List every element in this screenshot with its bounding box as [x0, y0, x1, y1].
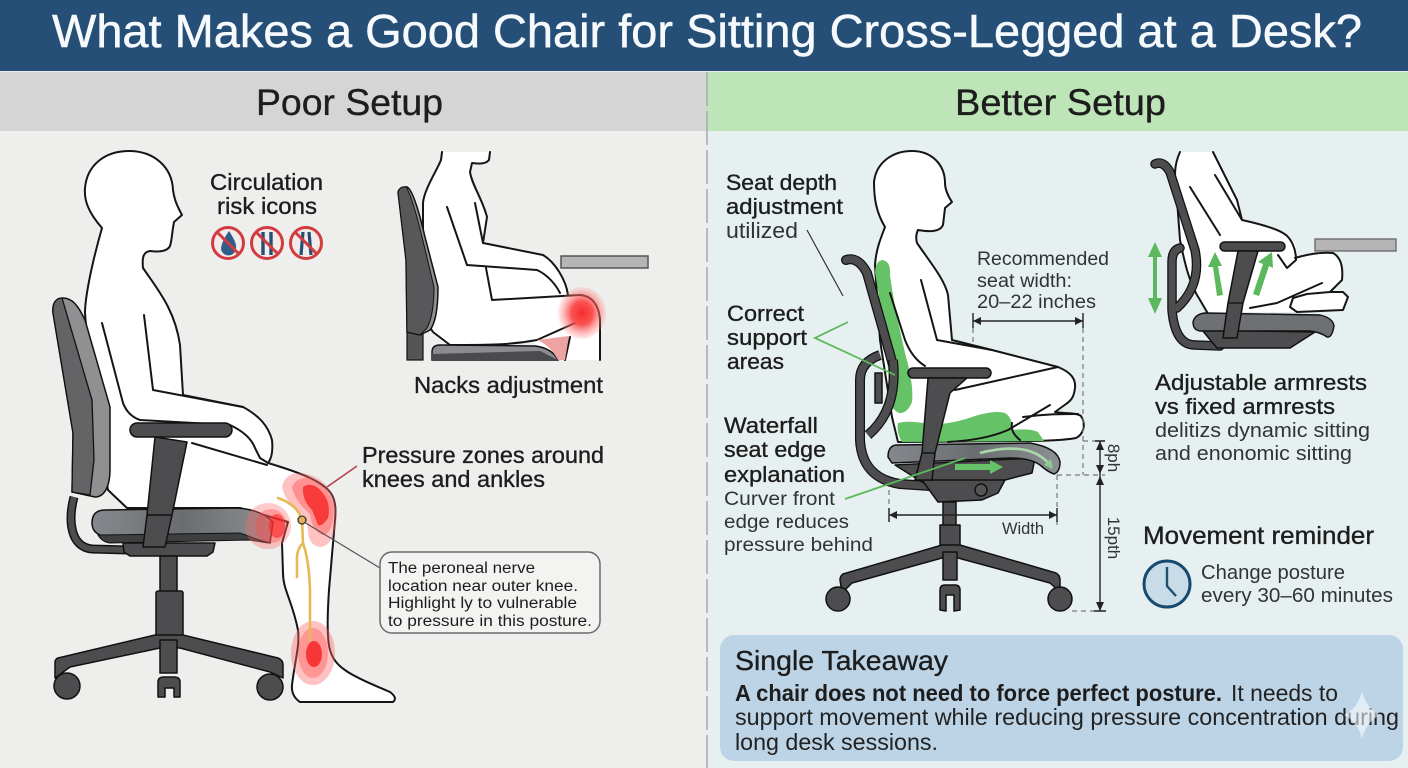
icon: clock: [1144, 561, 1190, 607]
inset: armrests detail: [1148, 152, 1396, 348]
better posture figure and chair: [826, 151, 1084, 611]
movement reminder: Movement reminder: [1143, 522, 1374, 550]
seat: [1202, 330, 1315, 348]
label: waterfall seat edge: explanation: [724, 462, 845, 487]
movement reminder: [1143, 522, 1393, 607]
text: adjustable armrests: Adjustable armrests: [1155, 370, 1367, 395]
heading: better setup: Better Setup: [955, 82, 1166, 123]
label: circulation risk icons: [210, 169, 323, 258]
pressure zone: ankle: [291, 621, 335, 685]
chair base: [55, 635, 283, 678]
pressure at knee: [558, 287, 606, 339]
panel: single takeaway: support movement while reducing pressure concentration during: [735, 704, 1399, 730]
label: waterfall seat edge: [724, 413, 965, 556]
text: adjustable armrests: and enonomic sitting: [1155, 443, 1352, 465]
panel: single takeaway: long desk sessions.: [735, 729, 938, 755]
dimension: recommended seat width: seat width:: [977, 271, 1072, 292]
body: [1175, 152, 1348, 312]
title banner: [0, 0, 1408, 71]
dimension: recommended seat width: 20–22 inches: [977, 292, 1096, 313]
arrow: arm up right: [1253, 252, 1273, 296]
label: seat depth: utilized: [726, 218, 798, 243]
movement reminder: Change posture: [1201, 562, 1345, 584]
armrest and post: [908, 368, 991, 378]
label: pressure zones: knees and ankles: [362, 466, 545, 492]
backrest: [398, 187, 438, 335]
chair post: [407, 330, 423, 360]
title banner: What Makes a Good Chair for Sitting Cross-Legged at a Desk?: [52, 5, 1362, 57]
mount: [922, 480, 1005, 502]
chair seat: [92, 508, 273, 543]
panel: single takeaway: [720, 635, 1403, 761]
inset: poor setup knee detail: [398, 152, 648, 360]
label: nacks adjustment: Nacks adjustment: [414, 372, 604, 398]
arrow: arm up left: [1208, 252, 1223, 296]
label: waterfall seat edge: Curver front: [724, 489, 836, 510]
heading: poor setup: [0, 72, 707, 131]
dimension: recommended seat width: [973, 249, 1109, 475]
arrow: double height: [1148, 242, 1162, 314]
pressure zone: knee: [282, 473, 337, 547]
label: correct support areas: Correct: [727, 301, 805, 326]
label: waterfall seat edge: seat edge: [724, 437, 826, 462]
chair backrest: [53, 298, 110, 497]
dimension: seat height: [1057, 441, 1123, 611]
main poor posture figure and chair: [53, 151, 395, 702]
heading: better setup: [707, 72, 1408, 131]
label: seat depth: Seat depth: [726, 170, 837, 195]
dimension: seat width: [889, 475, 1057, 538]
seat: [432, 345, 558, 360]
label: correct support areas: [727, 301, 895, 375]
label: circulation risk icons: Circulation: [210, 169, 323, 195]
chair back frame: [846, 259, 893, 365]
armrest: [1220, 242, 1285, 251]
peroneal nerve: [278, 498, 310, 640]
panel: single takeaway: It needs to: [1231, 680, 1338, 706]
label: waterfall seat edge: Waterfall: [724, 413, 818, 438]
panel: single takeaway: Single Takeaway: [735, 645, 948, 676]
green support: seat: [898, 412, 1044, 442]
heading: poor setup: Poor Setup: [256, 82, 443, 123]
pressure zone: seat edge: [245, 503, 291, 549]
icon: nerve prohibited: [290, 228, 322, 258]
label: waterfall seat edge: pressure behind: [724, 535, 873, 556]
body: [874, 151, 1084, 442]
icon: sparkle: [1344, 691, 1380, 739]
dimension: seat height: 15pth: [1104, 517, 1123, 559]
right panel background: [707, 131, 1408, 768]
chair frame: [1155, 163, 1220, 346]
chair mount and column: [123, 543, 215, 556]
panel: single takeaway: A chair does not need to force perfect posture.: [735, 680, 1222, 706]
waterfall edge arrow: [980, 449, 1050, 465]
label: correct support areas: areas: [727, 349, 784, 374]
left panel background: [0, 131, 707, 768]
seat arrow: [955, 460, 1003, 474]
icon: blood drop prohibited: [212, 228, 244, 258]
green support: back: [875, 260, 912, 413]
seat pan and seat: [895, 458, 1035, 482]
dimension: seat width: Width: [1002, 519, 1044, 538]
dimension: seat height: 8ph: [1104, 444, 1123, 472]
body detail lines: [890, 280, 1078, 442]
callout: peroneal nerve: Highlight ly to vulnerable: [388, 595, 577, 612]
label: correct support areas: support: [727, 325, 808, 350]
pressure under knee: [537, 336, 569, 360]
movement reminder: every 30–60 minutes: [1201, 585, 1393, 607]
label: pressure zones: [327, 442, 604, 492]
callout: peroneal nerve: location near outer knee.: [388, 578, 578, 595]
callout: peroneal nerve: The peroneal nerve: [388, 560, 535, 577]
label: waterfall seat edge: edge reduces: [724, 512, 849, 533]
desk: [561, 256, 648, 268]
label: seat depth: adjustment: [726, 194, 844, 219]
callout: peroneal nerve: [304, 522, 600, 633]
dimension: recommended seat width: Recommended: [977, 249, 1109, 270]
text: adjustable armrests: vs fixed armrests: [1155, 394, 1335, 419]
icon: vessel prohibited: [252, 228, 282, 258]
seated body outline: [85, 151, 395, 702]
chair post: [71, 497, 130, 550]
armrest: [130, 423, 232, 437]
desk: [1315, 239, 1396, 251]
label: circulation risk icons: risk icons: [217, 193, 317, 219]
arm lines: [102, 315, 268, 465]
callout: peroneal nerve: to pressure in this posture.: [388, 613, 592, 630]
column and base: [943, 502, 956, 526]
body: [423, 152, 600, 360]
text: adjustable armrests: delitizs dynamic sitting: [1155, 420, 1370, 442]
label: pressure zones: Pressure zones around: [362, 442, 604, 468]
text: adjustable armrests: [1155, 370, 1370, 465]
label: seat depth: [726, 170, 844, 296]
